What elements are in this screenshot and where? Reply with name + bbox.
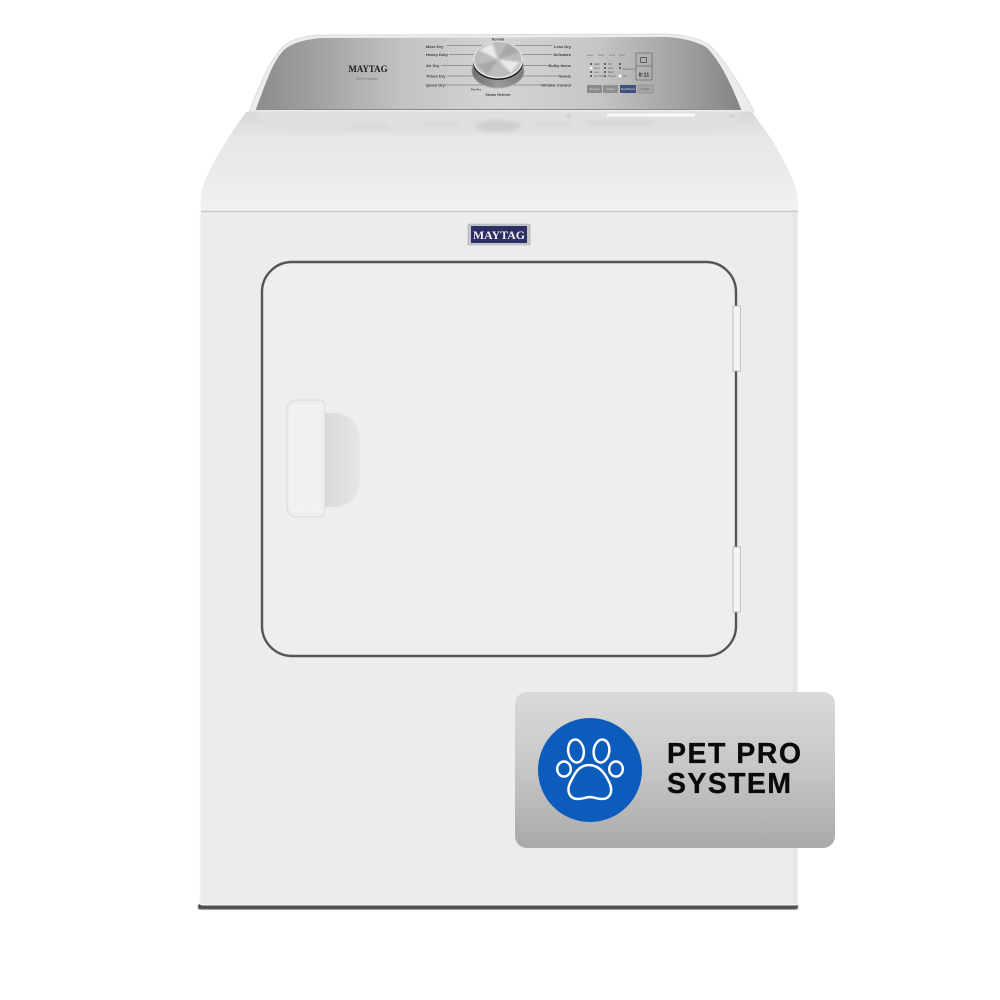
cabinet front: [200, 212, 798, 905]
right cycle labels: Less Dry: [554, 44, 572, 49]
control console: [249, 34, 754, 112]
status indicators: Low: [608, 66, 614, 70]
console frame: [249, 34, 754, 112]
status indicators: Damp Dry: [623, 67, 636, 71]
right cycle labels: Delicates: [553, 52, 572, 57]
dryer door: [262, 262, 740, 656]
left cycle labels: Heavy Duty: [426, 52, 449, 57]
status indicators: Off: [608, 62, 612, 66]
left cycle labels: Quick Dry: [426, 82, 446, 88]
status indicators: Timed: [608, 74, 616, 78]
top and bottom dial labels: Steam Refresh: [485, 93, 511, 97]
selector dial: [472, 42, 524, 88]
console metal panel: [256, 37, 741, 109]
top and bottom dial labels: [471, 38, 511, 97]
badge label: [667, 738, 801, 800]
panel reflection: [350, 120, 655, 132]
right cycle labels: Wrinkle Control: [541, 82, 571, 88]
right label leader lines: [514, 46, 557, 85]
status indicators: [587, 54, 636, 78]
right cycle labels: [541, 44, 572, 88]
option buttons: Start/Pause: [621, 87, 636, 91]
door handle recess: [324, 413, 360, 507]
left cycle labels: Air Dry: [426, 63, 440, 68]
status indicators: High: [594, 62, 600, 66]
time display: 8:11: [639, 72, 649, 78]
floor shadow: [198, 904, 798, 910]
brand badge: MAYTAG: [473, 230, 525, 242]
status indicators: Off: [623, 74, 627, 78]
option buttons: Steam: [606, 87, 615, 91]
top and bottom dial labels: Pet Pro: [471, 88, 481, 92]
lid highlight bar: [607, 114, 695, 116]
left cycle labels: Timed Dry: [426, 74, 446, 78]
console model line: Pet Pro System: [356, 77, 378, 81]
right cycle labels: Bulky Items: [549, 63, 572, 68]
brand logo on console: MAYTAG: [348, 64, 388, 74]
badge label: PET PRO: [667, 738, 801, 770]
left label leader lines: [441, 46, 483, 85]
lower hinge: [733, 547, 740, 612]
option buttons: Sensing: [589, 87, 600, 91]
door handle: [287, 400, 325, 517]
top and bottom dial labels: Normal: [492, 38, 504, 42]
brand badge: [468, 224, 530, 245]
status indicators: Med: [594, 66, 600, 70]
status indicators: Air Only: [594, 74, 605, 78]
upper hinge: [733, 306, 740, 371]
option buttons: [587, 85, 653, 93]
badge label: SYSTEM: [667, 768, 791, 800]
lid clips: [566, 114, 571, 118]
callout: pet pro system: [515, 692, 835, 848]
status indicators: Med: [608, 70, 614, 74]
cabinet side band: [793, 213, 797, 904]
dryer cabinet: [198, 212, 798, 910]
time display: [636, 53, 652, 80]
right cycle labels: Towels: [558, 74, 572, 78]
left cycle labels: [426, 44, 449, 88]
dryer top lid: [201, 110, 798, 212]
option buttons: Power: [642, 87, 650, 91]
left cycle labels: More Dry: [426, 44, 444, 49]
door outline: [262, 262, 736, 656]
icon: paw in blue circle: [538, 718, 642, 822]
lid recess under console: [254, 110, 742, 133]
badge plate: [515, 692, 835, 848]
status indicators: Low: [594, 70, 600, 74]
